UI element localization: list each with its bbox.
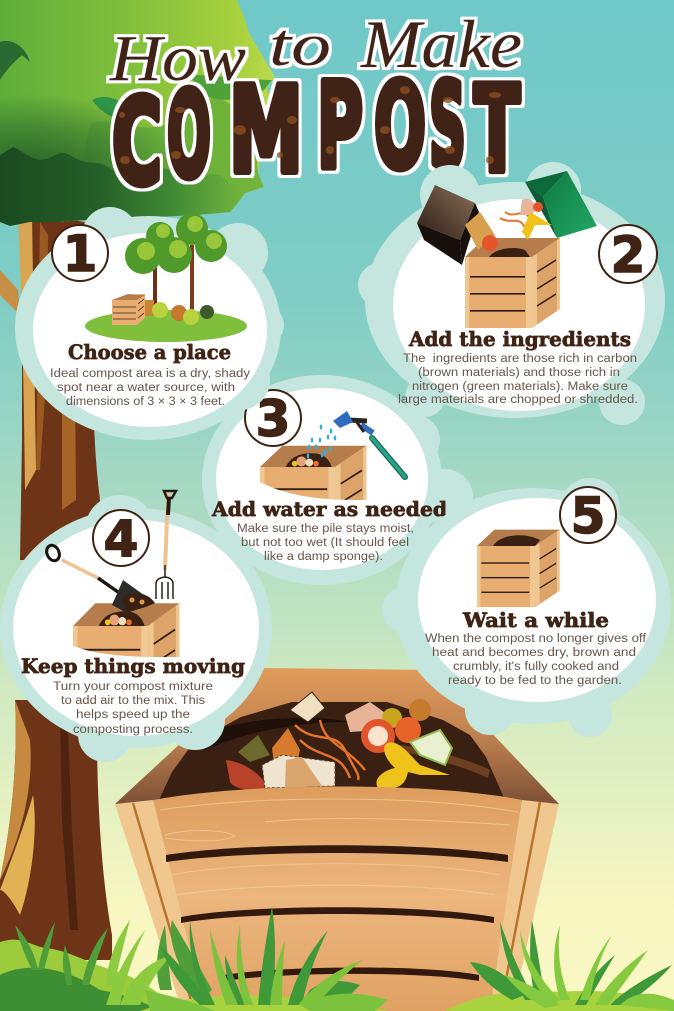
bin left post: [115, 800, 205, 1011]
falling food scraps: [465, 199, 552, 251]
panel: step 5 wait a while: [382, 478, 671, 737]
white circle: [33, 233, 267, 427]
body text: nitrogen (green materials). Make sure: [412, 381, 628, 393]
crate with compost: [260, 446, 366, 500]
body text: (brown materials) and those rich in: [418, 367, 620, 379]
body text: to add air to the mix. This: [61, 695, 205, 707]
title word: COMPOST: O: [374, 57, 426, 195]
body text: large materials are chopped or shredded.: [398, 394, 638, 406]
bin right post: [490, 800, 559, 1011]
title word: COMPOST: T: [474, 60, 520, 198]
body text: dimensions of 3 × 3 × 3 feet.: [66, 396, 225, 408]
icon: shovel: [44, 543, 155, 613]
panel: step 2 add the ingredients: [358, 162, 665, 425]
title word: COMPOST: P: [317, 57, 363, 195]
heading: Wait a while: [462, 608, 609, 632]
icon: hose and nozzle: [333, 411, 405, 477]
panel: step 4 keep things moving: [0, 491, 272, 762]
body text: but not too wet (It should feel: [241, 537, 409, 549]
body text: Make sure the pile stays moist,: [237, 523, 414, 535]
number badge 1: [52, 225, 108, 283]
body text: [398, 353, 638, 406]
body text: Turn your compost mixture: [53, 681, 213, 693]
compost soil pile: [159, 702, 505, 800]
number badge 3: [245, 390, 301, 448]
title: [109, 6, 522, 211]
body text: like a damp sponge).: [264, 551, 383, 563]
tree foliage: [0, 0, 275, 226]
panel halo: [382, 478, 671, 737]
body text: [425, 633, 647, 687]
body text: spot near a water source, with: [57, 382, 235, 394]
title line: How to Make: [109, 6, 522, 95]
icon: green box of green materials: [525, 171, 597, 238]
white circle: [393, 199, 645, 411]
number badge 2: [599, 225, 657, 284]
number badge 4: [93, 510, 149, 568]
number badge 4: 4: [104, 510, 138, 568]
number badge 5: [560, 487, 616, 545]
number badge 1: 1: [63, 225, 97, 283]
number badge 5: 5: [571, 487, 605, 545]
icon: water drops: [307, 424, 336, 458]
body text: crumbly, it's fully cooked and: [453, 661, 619, 673]
icon: pitchfork: [156, 491, 176, 599]
title word: COMPOST: O: [167, 66, 211, 204]
title line: How to Make: Make: [360, 6, 522, 82]
title line: How to Make: How: [109, 22, 246, 95]
bin front panel: [153, 786, 522, 1011]
grass and bushes: [0, 906, 674, 1011]
illustration: trees, bin and grass: [85, 213, 247, 342]
body text: The ingredients are those rich in carbon: [403, 353, 637, 365]
compost mound in crate: [489, 248, 530, 257]
body text: [50, 368, 250, 408]
body text: [237, 523, 414, 563]
compost mound in crate: [493, 535, 540, 546]
heading: Keep things moving: [21, 654, 245, 678]
bin interior wall: [115, 668, 559, 804]
body text: [53, 681, 213, 736]
white circle: [216, 388, 428, 570]
heading: Add water as needed: [211, 497, 447, 521]
title word: COMPOST: C: [112, 73, 162, 211]
body text: helps speed up the: [76, 709, 190, 721]
title word: COMPOST: M: [229, 61, 303, 199]
body text: When the compost no longer gives off: [425, 633, 647, 645]
crate: [465, 238, 560, 328]
grass ground: [85, 310, 247, 342]
heading: Choose a place: [68, 340, 231, 364]
large compost bin: [115, 668, 559, 1011]
heading: Add the ingredients: [408, 327, 631, 351]
panel halo: [15, 207, 284, 440]
tree trunk: [0, 215, 112, 960]
number badge 3: 3: [256, 390, 290, 448]
icon: black box of brown materials: [417, 185, 479, 265]
white circle: [13, 520, 259, 736]
title word: COMPOST: [112, 57, 520, 211]
panel: step 3 add water as needed: [202, 375, 473, 585]
body text: ready to be fed to the garden.: [448, 675, 622, 687]
title word: COMPOST: S: [429, 57, 466, 195]
food scraps: [226, 692, 452, 790]
number badge 2: 2: [611, 226, 645, 284]
panel halo: [358, 162, 665, 425]
body text: Ideal compost area is a dry, shady: [50, 368, 250, 380]
white circle: [418, 498, 656, 702]
crate with compost: [73, 603, 180, 657]
panel: step 1 choose a place: [15, 207, 284, 440]
body text: heat and becomes dry, brown and: [432, 647, 636, 659]
panel halo: [202, 375, 473, 585]
title line: How to Make: to: [269, 12, 331, 78]
panel halo: [0, 495, 272, 762]
bin slat gaps: [166, 845, 508, 862]
crate: [477, 530, 560, 607]
body text: composting process.: [73, 724, 193, 736]
